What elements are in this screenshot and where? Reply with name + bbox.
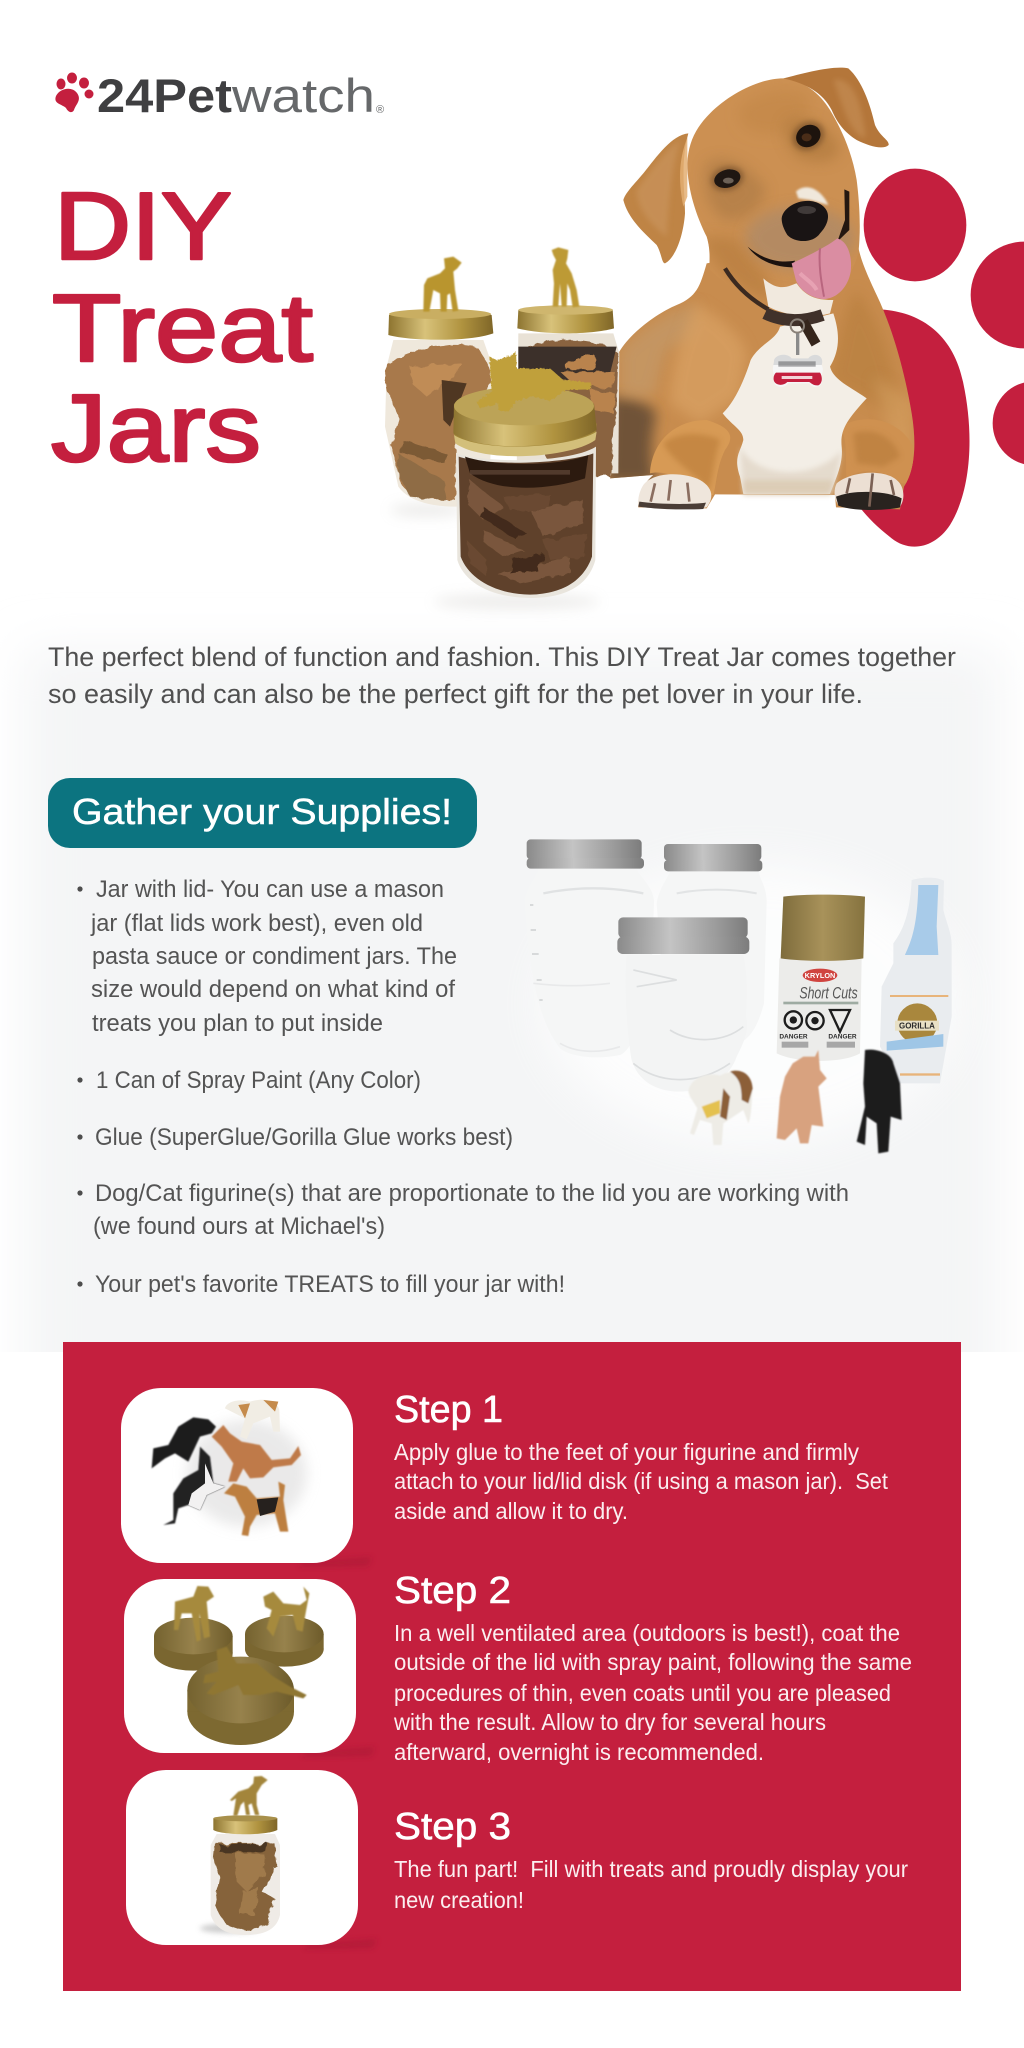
jar lid [213,1818,277,1834]
dog body [610,237,914,509]
step 1 [121,1388,888,1567]
empty jar medium [657,844,767,1043]
step 1 text: Apply glue to the feet of your figurine and firmly [394,1439,859,1465]
step 2 heading: Step 2 [394,1570,511,1612]
icon: red paw print [833,169,1024,547]
bullet: figurines: Dog/Cat figurine(s) that are proportionate to the lid you are working with [95,1180,849,1207]
icon: paw logo [55,72,94,112]
step 3 text: new creation! [394,1887,524,1913]
title: DIY Treat Jars: Jars [51,375,261,482]
gold dog figurine [230,1776,268,1816]
gold figurine dog front view [552,247,579,307]
step 3 text [394,1856,908,1913]
bullet: jar [77,876,457,1037]
spray can: KRYLON [805,971,835,980]
supplies list [77,876,849,1298]
bullet: jar: treats you plan to put inside [92,1010,383,1037]
white chest [723,313,867,494]
white blaze [796,187,828,205]
step 3 [126,1770,908,1949]
step 1 text [394,1439,888,1524]
hero: treat jars [385,247,619,609]
step 2 text: outside of the lid with spray paint, following the same [394,1649,912,1675]
bullet: jar: pasta sauce or condiment jars. The [92,943,457,970]
title: DIY Treat Jars [51,173,313,482]
treats in front jar [467,480,587,583]
treats [213,1843,277,1932]
face shading [700,90,855,303]
figurine: tan dog [777,1050,827,1143]
eye left [708,163,747,195]
figurine shadows [187,1420,307,1527]
spray can [777,895,865,1061]
intro text: so easily and can also be the perfect gift for the pet lover in your life. [48,679,863,709]
step 3 heading: Step 3 [394,1806,511,1848]
supplies photo [525,839,957,1153]
lid left [154,1618,233,1671]
gold dog left [174,1586,214,1642]
bullet: jar: jar (flat lids work best), even old [90,910,423,937]
spray can: DANGER [779,1033,808,1040]
dog photo [607,68,914,510]
gold cat figurine [477,352,592,412]
back jar right [517,247,619,477]
step 3 text: The fun part! Fill with treats and proudly display your [394,1856,908,1882]
bullet: jar: size would depend on what kind of [91,976,455,1003]
empty jar large [525,839,654,1057]
logo: 24Petwatch [55,69,384,122]
step 2 photo card [124,1579,375,1757]
head [687,78,860,310]
step 2 text [393,1620,912,1765]
bullet: glue: Glue (SuperGlue/Gorilla Glue works best) [95,1124,513,1151]
figurine: black and white dog [163,1447,225,1525]
title: DIY Treat Jars: Treat [52,275,313,382]
front paws [638,473,903,510]
lid right [245,1616,324,1667]
jar shadow [200,1924,260,1933]
logo wordmark: ® [376,104,384,116]
bullet: jar: Jar with lid- You can use a mason [96,876,444,903]
dog tag [773,333,823,387]
hero: dog with paw print [607,68,1024,547]
left ear [623,133,688,263]
gold figurine dog side view [423,257,462,312]
white neck [763,278,833,316]
intro text [48,642,956,709]
figurine: beagle [224,1482,288,1536]
heading: Gather your Supplies [48,778,477,848]
step 3 photo card [126,1770,377,1949]
step 1 heading: Step 1 [394,1389,503,1431]
front jar lid [453,423,597,455]
bullet: treats: Your pet's favorite TREATS to fill your jar with! [95,1271,565,1298]
heading: Gather your Supplies: Gather your Supplies! [72,791,452,832]
gold dog lying [203,1647,307,1698]
step 1 text: aside and allow it to dry. [394,1498,628,1524]
intro text: The perfect blend of function and fashion. This DIY Treat Jar comes together [48,642,956,672]
back jar left [385,257,493,507]
spray can: Short Cuts [799,983,858,1002]
bullet: figurines [77,1180,849,1240]
panel: steps [63,1342,961,1991]
gorilla glue bottle: GORILLA [899,1022,935,1031]
step 2 [124,1570,912,1765]
empty jar small [617,917,749,1092]
logo wordmark: watch [231,69,375,122]
spray can: DANGER [828,1033,857,1040]
mouth [748,247,795,267]
treat jar glass [211,1834,280,1935]
figurine: black dog [152,1417,216,1468]
front jar [453,352,597,598]
bullet: spray paint: 1 Can of Spray Paint (Any Color) [96,1067,421,1094]
figurine: white dog [225,1400,280,1432]
step 2 text: In a well ventilated area (outdoors is best!), coat the [394,1620,900,1646]
title: DIY Treat Jars: DIY [54,173,232,280]
figurine: orange cat [212,1425,301,1482]
logo wordmark: 24Pet [97,69,232,122]
right ear flap [783,68,889,147]
step 1 photo card [121,1388,372,1567]
collar [725,268,823,344]
panel: supplies background [41,666,983,1352]
step 2 text: with the result. Allow to dry for several hours [393,1709,826,1735]
body shading [607,290,913,495]
figurine: black dog [857,1050,902,1153]
jar shadows [390,503,600,609]
eye right [787,116,830,156]
white glow [543,863,957,1143]
step 1 text: attach to your lid/lid disk (if using a mason jar). Set [394,1468,888,1494]
tongue [792,238,851,299]
nose [782,201,828,241]
gorilla glue bottle [880,878,952,1083]
step 2 text: afterward, overnight is recommended. [394,1739,764,1765]
figurine: bulldog [688,1071,753,1145]
gold dog right [263,1587,309,1637]
logo wordmark [97,69,384,122]
bullet: figurines: (we found ours at Michael's) [93,1213,385,1240]
lid front [187,1657,294,1745]
step 2 text: procedures of thin, even coats until you are pleased [394,1680,891,1706]
